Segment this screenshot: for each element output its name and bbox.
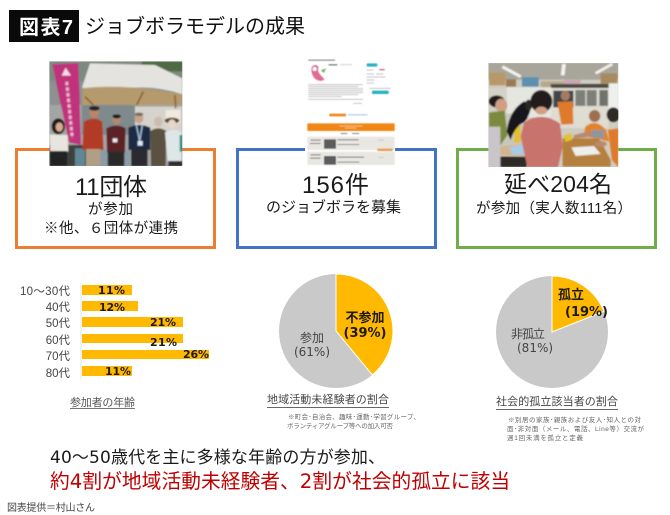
caption: social isolation: 週1回未満を孤立と定義 (507, 433, 584, 442)
bar chart: participant ages: 21% (150, 336, 177, 349)
pie chart: no community activity experience (279, 274, 393, 388)
pie chart: social isolation: (19%) (565, 305, 608, 320)
bar chart: participant ages: 12% (99, 301, 125, 314)
pie chart: social isolation (496, 276, 608, 388)
source credit: 図表提供＝村山さん (7, 501, 95, 514)
bar chart: participant ages: 60代 (46, 334, 70, 347)
pie chart: social isolation: 孤立 (558, 287, 584, 302)
bar chart: participant ages: 10～30代 (20, 285, 70, 298)
caption: community activity: ※町会･自治会、趣味･運動･学習グループ、 (288, 412, 420, 421)
bar chart: participant ages: 50代 (46, 317, 70, 330)
stat: organisations: が参加 (88, 201, 133, 218)
caption: community activity (267, 392, 420, 430)
bar chart: participant ages: 40代 (46, 301, 70, 314)
photo: volunteers in front of a tent (49, 61, 182, 166)
caption: social isolation: 面･非対面（メール、電話、Line等）交流が (507, 424, 644, 433)
caption: community activity: 地域活動未経験者の割合 (267, 392, 389, 406)
bar chart: participant ages: 26% (183, 348, 209, 361)
bar chart: participant ages: 70代 (46, 350, 70, 363)
caption: social isolation (496, 394, 644, 442)
photo: volunteers at a table indoors (488, 63, 620, 167)
panel: organisations box (16, 150, 214, 248)
bar chart: participant ages: 11% (98, 284, 125, 297)
pie chart: no community activity experience: 参加 (300, 331, 324, 345)
stat: job postings (266, 172, 401, 216)
summary text (50, 448, 510, 493)
pie chart: social isolation: 非孤立 (511, 327, 545, 341)
stat: job postings: 156件 (302, 172, 369, 199)
stat: organisations: 11団体 (75, 174, 147, 201)
stat: organisations: ※他、６団体が連携 (44, 220, 178, 237)
summary text: 40～50歳代を主に多様な年齢の方が参加、 (50, 448, 385, 468)
caption: social isolation: ※別居の家族･親族および友人･知人との対 (508, 415, 642, 424)
photo: job board web page screenshot (305, 58, 395, 166)
bar chart: participant ages: 80代 (46, 367, 70, 380)
bar chart: participant ages: 21% (150, 316, 176, 329)
stat: participants (476, 171, 632, 217)
pie chart: no community activity experience: (61%) (294, 345, 330, 359)
summary text: 約4割が地域活動未経験者、2割が社会的孤立に該当 (50, 470, 510, 493)
panel: job postings box (238, 150, 436, 248)
title: ジョブボラモデルの成果 (85, 14, 305, 38)
panel: participants box (458, 150, 656, 248)
caption: participant ages: 参加者の年齢 (70, 395, 135, 409)
bar chart: participant ages: 11% (105, 365, 131, 378)
stat: organisations (44, 174, 178, 237)
caption: social isolation: 社会的孤立該当者の割合 (496, 394, 618, 408)
stat: job postings: のジョブボラを募集 (266, 198, 401, 216)
bar chart: participant ages (20, 283, 209, 380)
pie chart: no community activity experience: (39%) (344, 326, 386, 341)
stat: participants: が参加（実人数111名） (476, 200, 632, 217)
pie chart: social isolation: (81%) (517, 341, 553, 355)
title: 図表7 (19, 16, 73, 39)
title (9, 10, 305, 42)
pie chart: no community activity experience: 不参加 (346, 310, 384, 325)
stat: participants: 延べ204名 (504, 171, 612, 197)
caption: community activity: ボランティアグループ等への加入可否 (287, 421, 394, 430)
